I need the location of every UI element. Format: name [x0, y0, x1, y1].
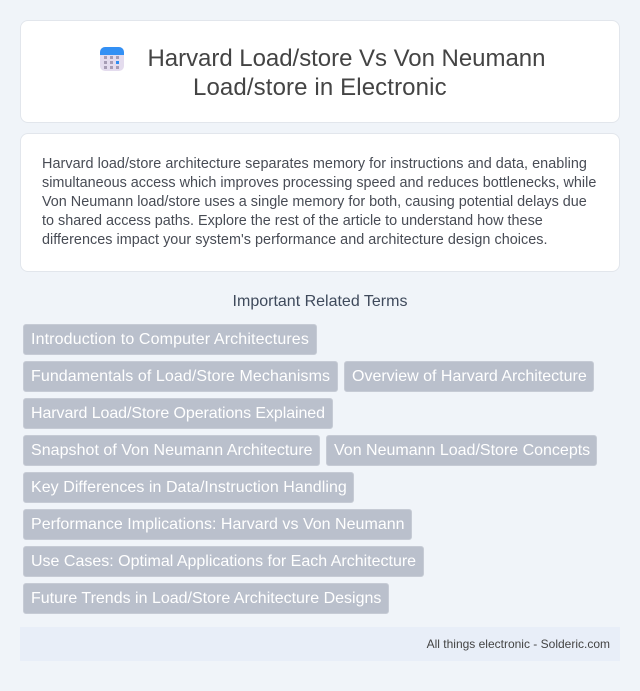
text block: description: differences impact your system's performance and architecture design choices. — [42, 232, 548, 248]
footer text: All things electronic - Solderic.com — [427, 637, 610, 651]
tag: Von Neumann Load/Store Concepts — [334, 442, 590, 459]
tag — [23, 398, 333, 429]
title — [148, 45, 545, 101]
tag — [23, 583, 389, 614]
text block: description: to shared access paths. Explore the rest of the article to understand how these — [42, 213, 543, 229]
tag: Overview of Harvard Architecture — [352, 368, 587, 385]
tag — [23, 361, 338, 392]
text block: description — [42, 156, 596, 248]
list of related term tags — [23, 324, 597, 614]
icon: calendar — [100, 47, 124, 71]
title: Harvard Load/store Vs Von Neumann — [148, 45, 545, 72]
tag: Future Trends in Load/Store Architecture Designs — [31, 590, 381, 607]
tag — [23, 509, 412, 540]
panel: title card — [20, 20, 620, 123]
tag — [23, 546, 424, 577]
tag — [344, 361, 594, 392]
panel: description card — [20, 133, 620, 272]
tag: Snapshot of Von Neumann Architecture — [31, 442, 313, 459]
tag — [23, 324, 317, 355]
text block: description: simultaneous access which improves processing speed and reduces bottlenecks, while — [42, 175, 596, 191]
text block: description: Von Neumann load/store uses a single memory for both, causing potential delays due — [42, 194, 587, 210]
tag: Performance Implications: Harvard vs Von Neumann — [31, 516, 405, 533]
tag — [326, 435, 597, 466]
footer bar — [20, 627, 620, 661]
text block: description: Harvard load/store architecture separates memory for instructions and data, enabling — [42, 156, 587, 172]
heading: important related terms: Important Related Terms — [233, 293, 407, 310]
tag: Fundamentals of Load/Store Mechanisms — [31, 368, 330, 385]
tag — [23, 472, 354, 503]
tag: Harvard Load/Store Operations Explained — [31, 405, 325, 422]
title: Load/store in Electronic — [193, 74, 447, 101]
tag: Key Differences in Data/Instruction Handling — [31, 479, 347, 496]
tag — [23, 435, 320, 466]
tag: Use Cases: Optimal Applications for Each Architecture — [31, 553, 416, 570]
tag: Introduction to Computer Architectures — [31, 331, 309, 348]
